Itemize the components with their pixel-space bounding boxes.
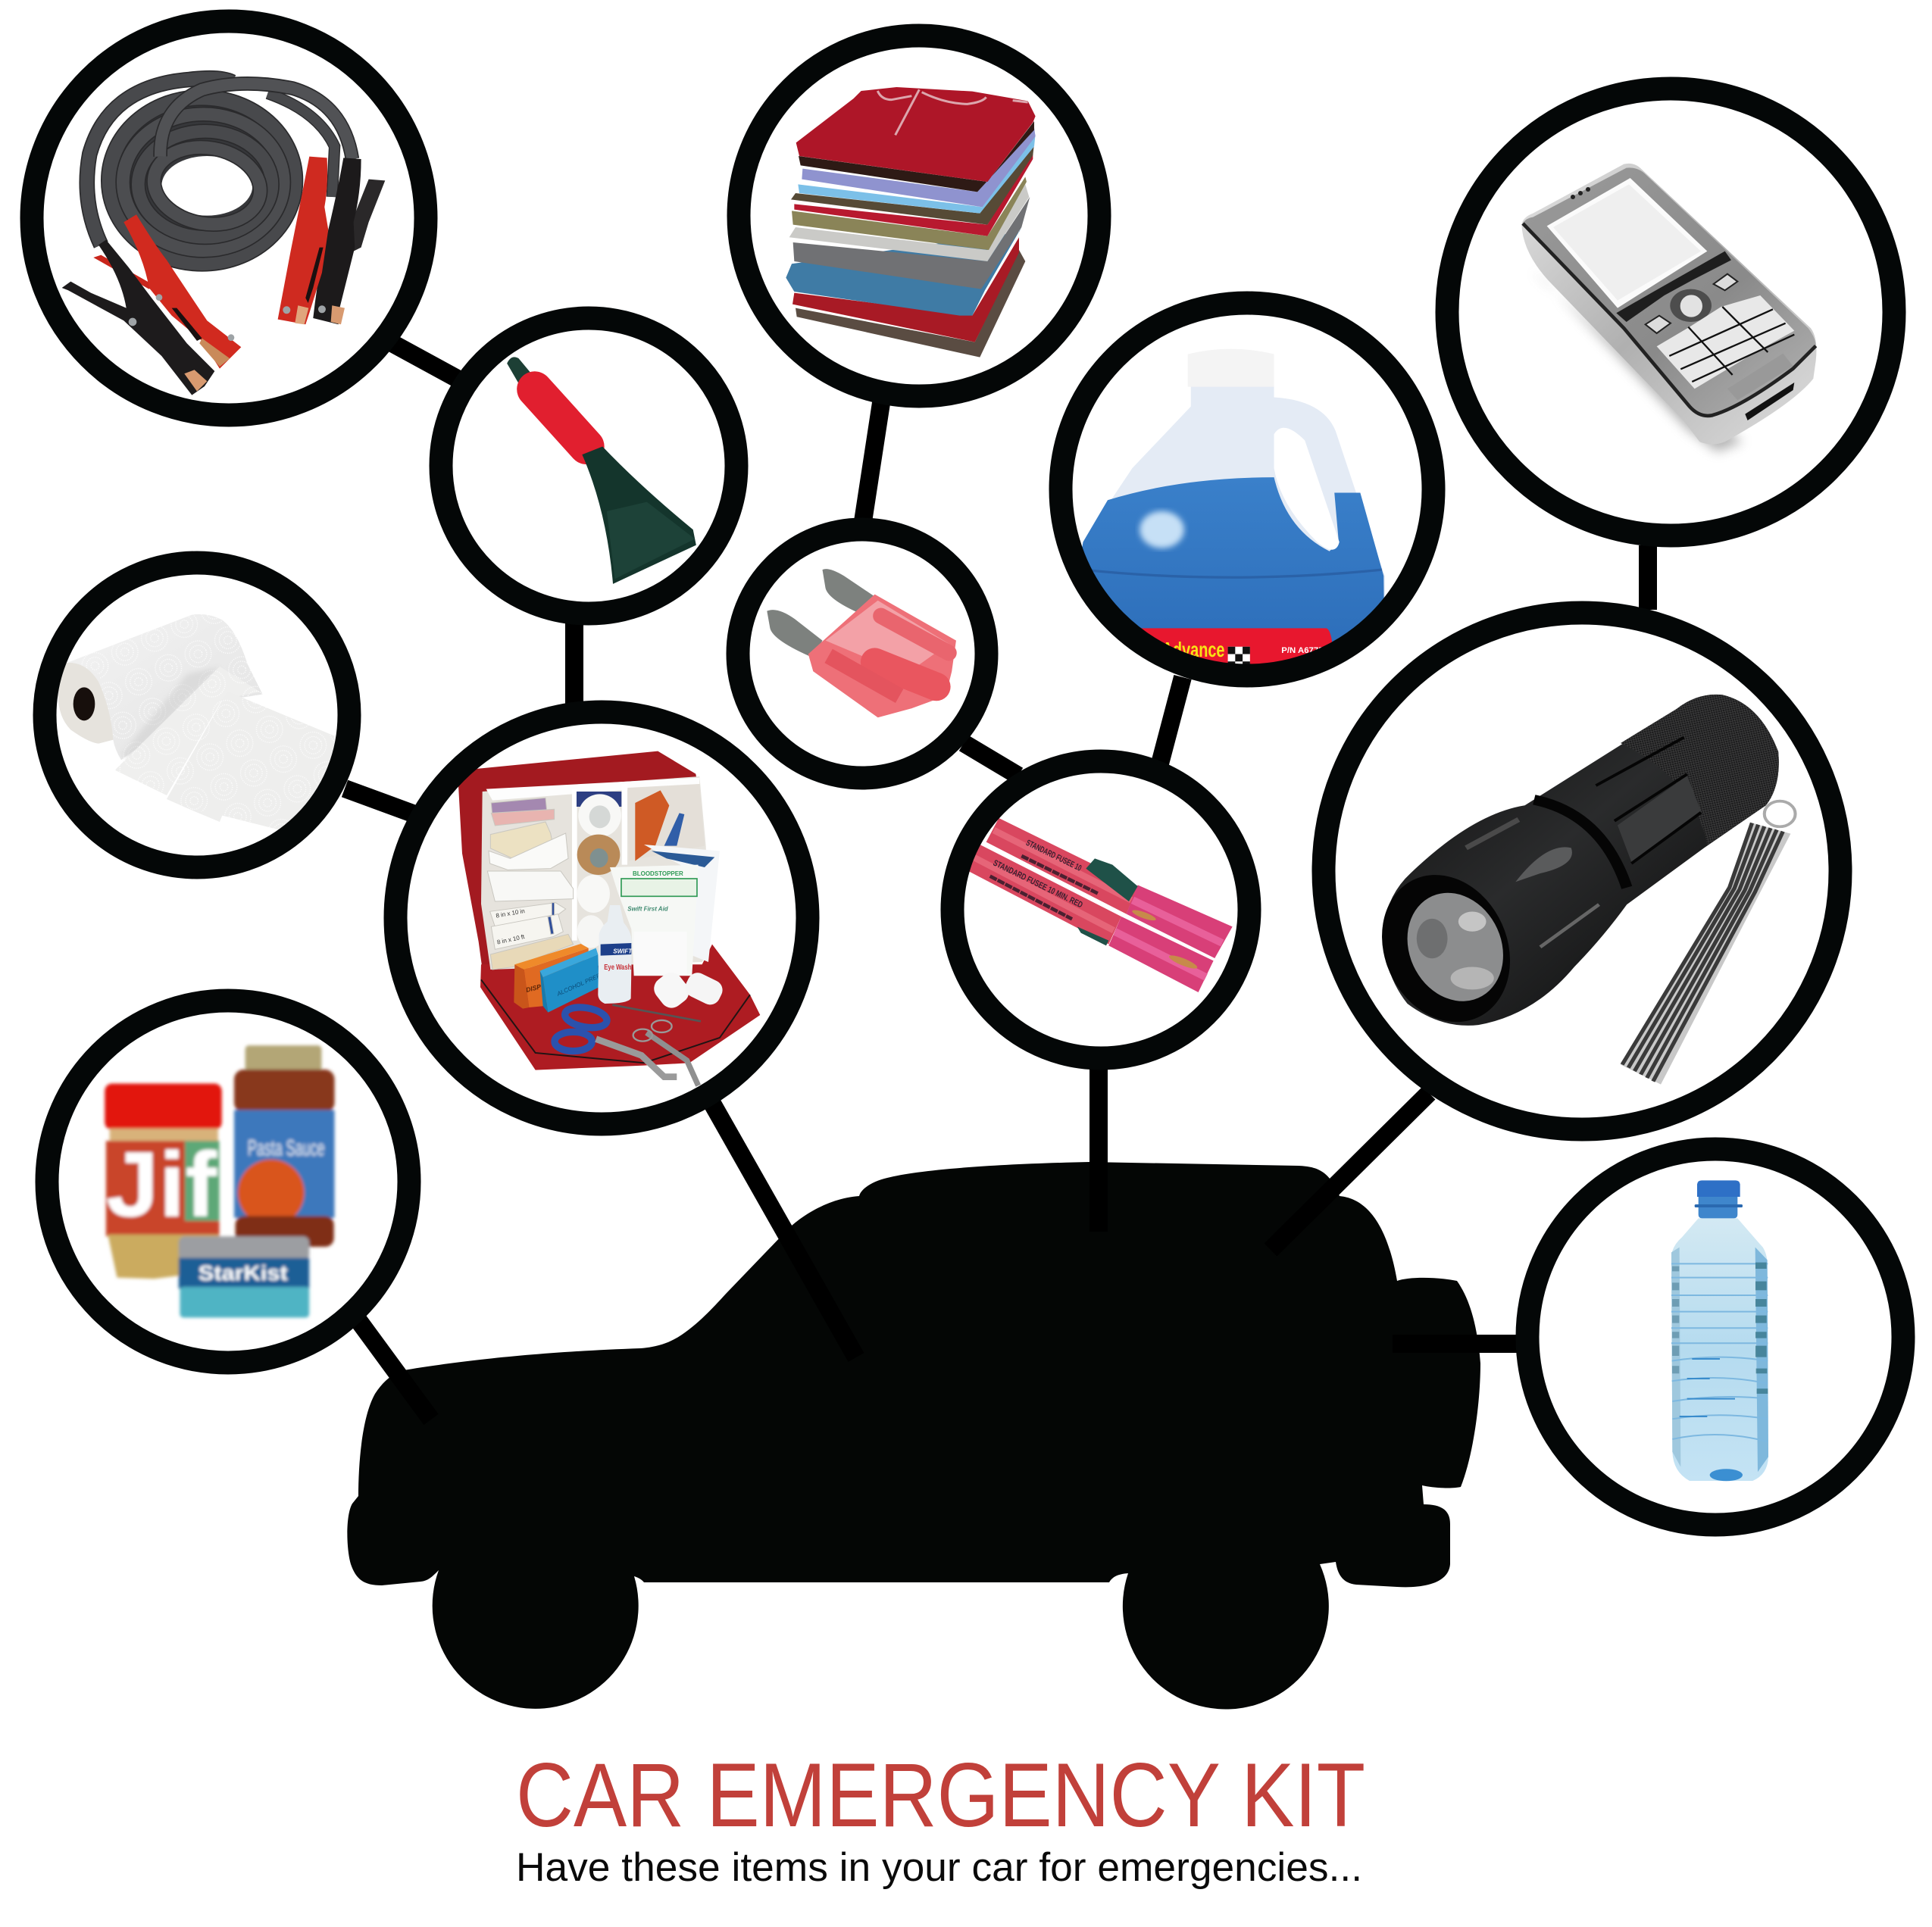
connector: food to car: [356, 1317, 431, 1419]
first aid kit contents middle: [577, 792, 621, 948]
first aid kit scissors: [555, 1004, 701, 1085]
icon: ice scraper: [507, 357, 696, 584]
icon: food jars and can: [105, 1045, 335, 1318]
subtitle: Have these items in your car for emergencies...: [516, 1845, 1362, 1890]
connector: first aid to car: [711, 1102, 856, 1357]
first aid kit contents right: [610, 784, 720, 976]
connector: towels to first aid: [345, 789, 419, 816]
connector: washer fluid to flares: [1160, 677, 1183, 764]
icon: first aid kit: [458, 751, 760, 1085]
connector: flashlight to car: [1271, 1093, 1429, 1250]
ring: fuse: [738, 529, 986, 778]
connector: water to car: [1393, 1335, 1534, 1353]
connector: scraper to first aid: [565, 610, 583, 711]
ring: first aid kit: [395, 712, 808, 1124]
icon: food jars and can: Jif: [106, 1132, 217, 1235]
icon: paper towels: [58, 614, 335, 829]
icon: flares: [966, 818, 1233, 992]
ring: jumper cables: [32, 21, 426, 415]
connector: phone to flashlight: [1639, 545, 1657, 610]
ring: ice scraper: [441, 318, 736, 614]
icon: stack of clothes: [786, 87, 1036, 358]
title: CAR EMERGENCY KIT: [516, 1744, 1365, 1846]
connector: clothes to fuse: [862, 403, 881, 526]
ring: clothes: [739, 36, 1099, 396]
first aid kit contents left: 8 in x 10 ft: [496, 933, 526, 946]
first aid kit eye wash bottle: Eye Wash: [604, 964, 631, 972]
first aid kit eye wash bottle: [598, 905, 633, 1004]
icon: flashlight: [1362, 695, 1796, 1085]
car silhouette: [347, 1162, 1480, 1710]
first aid kit boxes: ALCOHOL PREP: [555, 972, 602, 998]
icon: mobile phone: [1521, 164, 1816, 452]
icon: washer fluid jug: P/N A6775: [1281, 646, 1324, 655]
first aid kit rolls and gauze: [634, 932, 726, 1013]
ring: water: [1527, 1149, 1903, 1525]
first aid kit contents left: [487, 798, 574, 970]
first aid kit contents left: 8 in x 10 in: [496, 907, 525, 920]
icon: flares: STANDARD FUSEE 10 MIN. RED: [992, 859, 1084, 910]
ring: flashlight: [1324, 613, 1840, 1129]
icon: washer fluid jug: [1082, 349, 1385, 664]
first aid kit eye wash bottle: SWIFT: [613, 948, 633, 954]
icon: food jars and can: StarKist: [199, 1261, 288, 1285]
first aid kit boxes: [514, 944, 602, 1013]
ring: washer fluid: [1061, 303, 1433, 676]
icon: automotive fuse: [767, 569, 956, 717]
ring: paper towels: [45, 563, 349, 867]
connector: fuse to flares: [964, 743, 1018, 776]
icon: flares: STANDARD FUSEE 10: [1024, 839, 1083, 873]
ring: food: [47, 1001, 409, 1363]
ring: phone: [1447, 89, 1894, 536]
icon: washer fluid jug: Advance: [1162, 638, 1225, 661]
first aid kit contents right: Swift First Aid: [627, 906, 669, 913]
connector: jumper cables to scraper: [388, 341, 471, 386]
ring: flares: [952, 761, 1249, 1058]
connector: flares to car: [1089, 1047, 1108, 1232]
icon: food jars and can: Pasta Sauce: [248, 1137, 325, 1161]
first aid kit boxes: DISP: [525, 982, 542, 994]
first aid kit contents right: BLOODSTOPPER: [633, 870, 683, 877]
icon: jumper cables: [62, 78, 385, 395]
icon: water bottle: [1671, 1180, 1768, 1481]
